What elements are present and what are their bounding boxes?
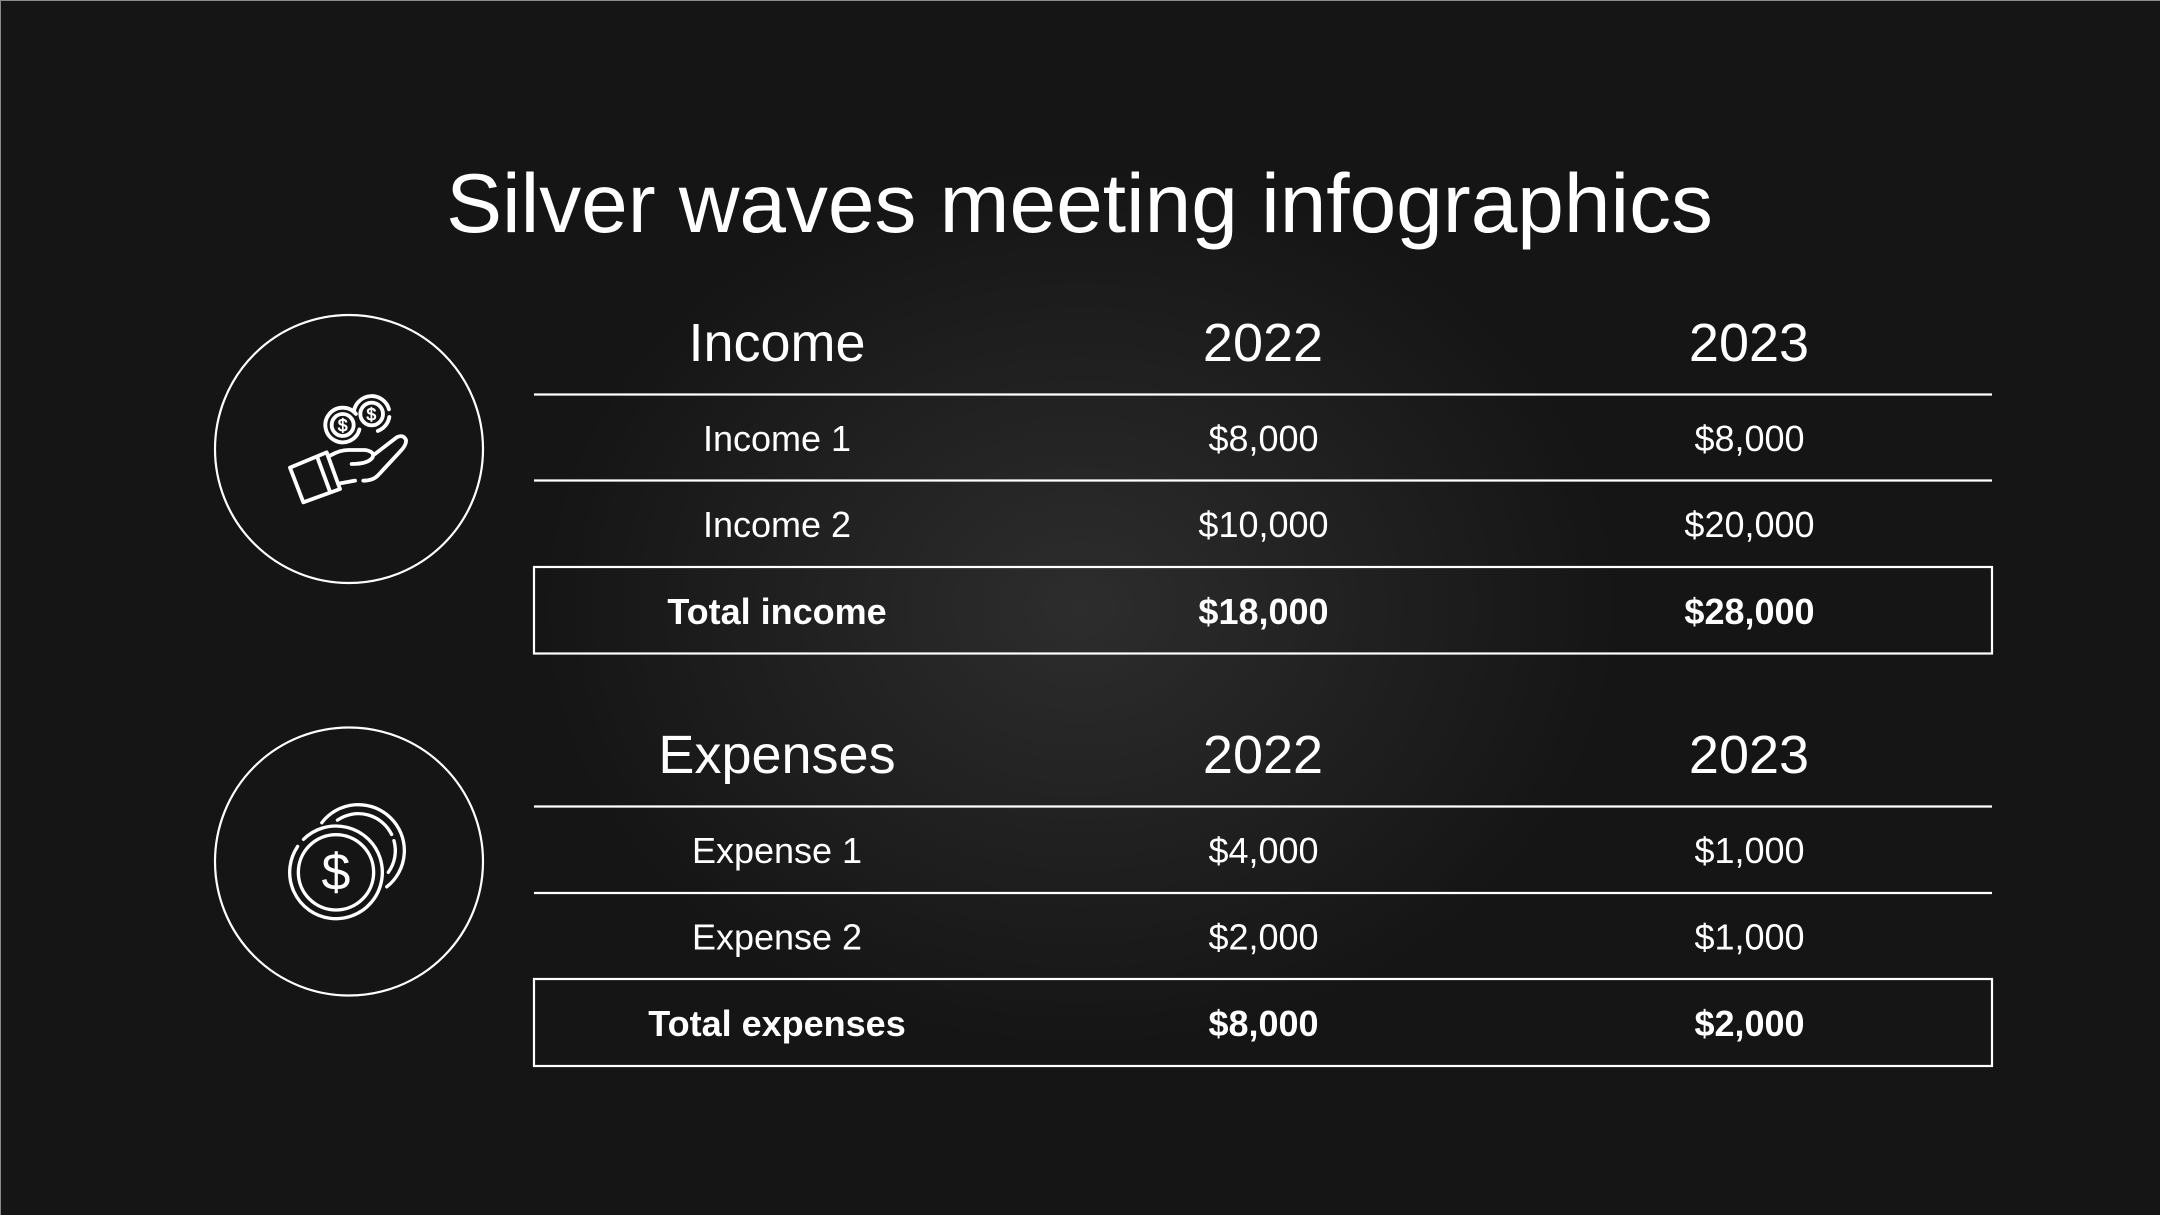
income row 2: $20,000 <box>1684 504 1815 545</box>
income header <box>688 313 1809 373</box>
income row 1: Income 1 <box>703 418 851 459</box>
expense row 1: $1,000 <box>1694 830 1805 871</box>
expense row 1: Expense 1 <box>692 830 862 871</box>
income header: Income <box>688 313 866 373</box>
title: Silver waves meeting infographics <box>446 156 1713 250</box>
expenses header: 2023 <box>1689 725 1809 785</box>
expenses header <box>658 725 1809 785</box>
expense row 1: $4,000 <box>1208 830 1319 871</box>
total income row <box>534 567 1992 654</box>
expenses table <box>534 725 1992 1066</box>
total expenses row: $2,000 <box>1694 1003 1805 1044</box>
income row 1 <box>703 418 1805 459</box>
income table <box>534 313 1992 654</box>
total expenses row: $8,000 <box>1208 1003 1319 1044</box>
income header: 2023 <box>1689 313 1809 373</box>
expense row 2 <box>692 916 1805 958</box>
total income row: $18,000 <box>1198 591 1329 632</box>
income row 1: $8,000 <box>1694 418 1805 459</box>
income row 1: $8,000 <box>1208 418 1319 459</box>
total income row: $28,000 <box>1684 591 1815 632</box>
expense row 2: Expense 2 <box>692 916 862 958</box>
income row 2: $10,000 <box>1198 504 1329 545</box>
expenses header: Expenses <box>658 725 896 785</box>
icon: circle with two coins <box>215 728 483 996</box>
expense row 1 <box>692 830 1805 871</box>
income row 2 <box>703 504 1815 545</box>
income header: 2022 <box>1203 313 1323 373</box>
total expenses row: Total expenses <box>648 1003 906 1044</box>
income row 2: Income 2 <box>703 504 851 545</box>
icon: circle with two coins: $ <box>322 843 351 901</box>
total expenses row <box>534 979 1992 1066</box>
icon: circle with hand and coins: $ <box>367 404 377 424</box>
expense row 2: $2,000 <box>1208 916 1319 958</box>
expenses header: 2022 <box>1203 725 1323 785</box>
icon: circle with hand and coins: $ <box>338 415 348 435</box>
total income row: Total income <box>667 591 887 632</box>
icon: circle with hand and coins <box>215 315 483 583</box>
expense row 2: $1,000 <box>1694 916 1805 958</box>
